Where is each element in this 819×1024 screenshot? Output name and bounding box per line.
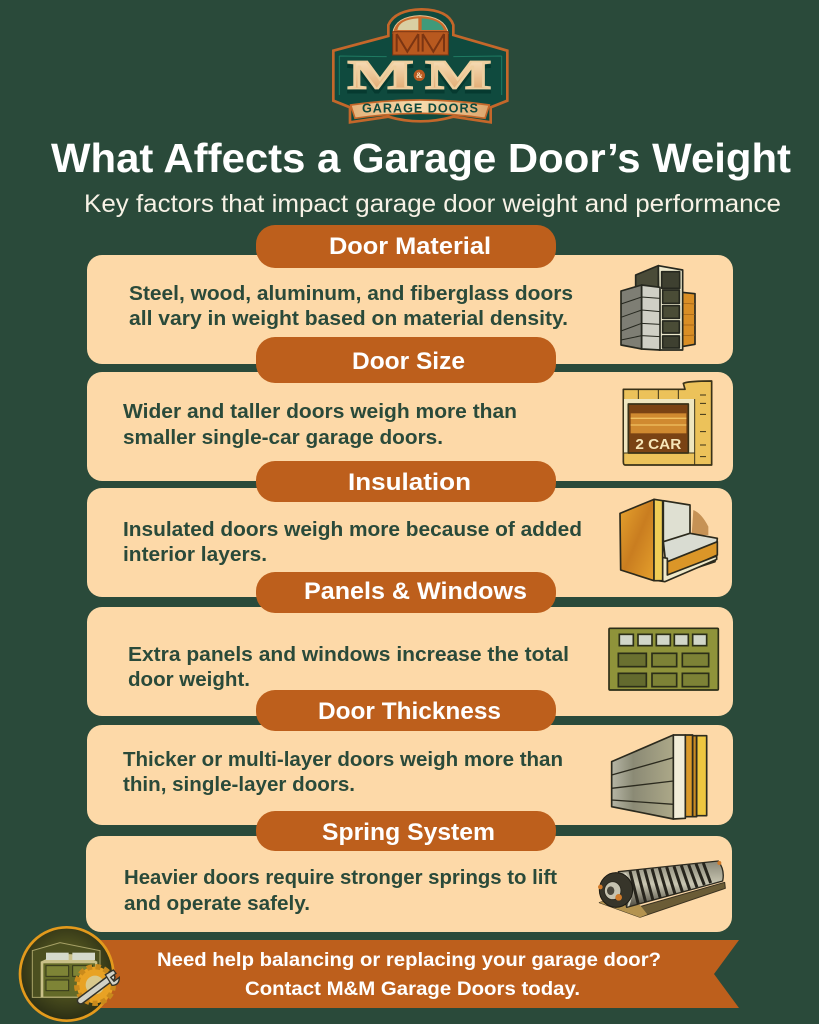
icon: two car door with ruler: 2 CAR — [635, 437, 682, 453]
text: door material — [129, 283, 573, 330]
icon: garage door and gear badge — [20, 927, 119, 1021]
heading: door thickness: Door Thickness — [318, 698, 501, 725]
subtitle: Key factors that impact garage door weight and performance — [84, 190, 781, 218]
text: spring system — [124, 867, 557, 915]
panel: door material — [87, 255, 733, 364]
text: door thickness: thin, single-layer doors. — [123, 774, 355, 796]
text: panels and windows — [128, 644, 569, 691]
heading: door material — [256, 225, 556, 268]
text: door size: Wider and taller doors weigh more than — [123, 401, 517, 423]
heading: insulation — [256, 461, 556, 502]
text: panels and windows: Extra panels and windows increase the total — [128, 644, 569, 666]
icon: door with windows — [609, 628, 718, 690]
text: door thickness: Thicker or multi-layer doors weigh more than — [123, 749, 563, 771]
heading: door size — [256, 337, 556, 383]
panel: door size — [87, 372, 733, 481]
icon: material blocks — [621, 266, 695, 350]
icon: insulated door section — [620, 499, 717, 582]
icon: torsion spring — [598, 861, 725, 917]
logo: M&M Garage Doors: M — [348, 51, 414, 97]
heading: spring system — [256, 811, 556, 851]
text: door thickness — [123, 749, 563, 796]
logo: M&M Garage Doors: & — [416, 71, 423, 80]
panel: spring system — [86, 836, 732, 932]
title: What Affects a Garage Door’s Weight — [51, 135, 791, 181]
logo: M&M Garage Doors: GARAGE DOORS — [362, 101, 478, 115]
text: door size: smaller single-car garage doors. — [123, 427, 443, 449]
heading: door size: Door Size — [352, 348, 465, 375]
text: insulation: Insulated doors weigh more because of added — [123, 519, 582, 541]
text: door size — [123, 401, 517, 449]
banner — [351, 100, 489, 118]
text: door material: all vary in weight based on material density. — [129, 308, 568, 330]
heading: door material: Door Material — [329, 233, 491, 260]
logo: M&M Garage Doors: M — [425, 51, 491, 97]
call to action ribbon: Contact M&M Garage Doors today. — [245, 978, 580, 1000]
text: insulation: interior layers. — [123, 544, 267, 566]
panel: door thickness — [87, 725, 733, 825]
call to action ribbon: Need help balancing or replacing your garage door? — [157, 949, 661, 971]
text: panels and windows: door weight. — [128, 669, 250, 691]
logo: M&M Garage Doors — [333, 9, 507, 122]
text: insulation — [123, 519, 582, 566]
heading: panels and windows: Panels & Windows — [304, 578, 527, 605]
text: spring system: and operate safely. — [124, 893, 310, 915]
text: door material: Steel, wood, aluminum, and fiberglass doors — [129, 283, 573, 305]
heading: door thickness — [256, 690, 556, 731]
heading: insulation: Insulation — [348, 469, 471, 496]
call to action ribbon — [100, 940, 739, 1008]
heading: spring system: Spring System — [322, 819, 495, 846]
logo: M&M Garage Doors: M — [425, 55, 491, 101]
M letters: M — [348, 55, 414, 101]
icon: two car door with ruler — [623, 381, 712, 465]
icon: layered door edge — [612, 735, 707, 819]
panel: panels and windows — [87, 607, 733, 716]
heading: panels and windows — [256, 572, 556, 613]
panel: insulation — [87, 488, 732, 597]
text: spring system: Heavier doors require stronger springs to lift — [124, 867, 557, 889]
arched door window — [393, 16, 448, 33]
